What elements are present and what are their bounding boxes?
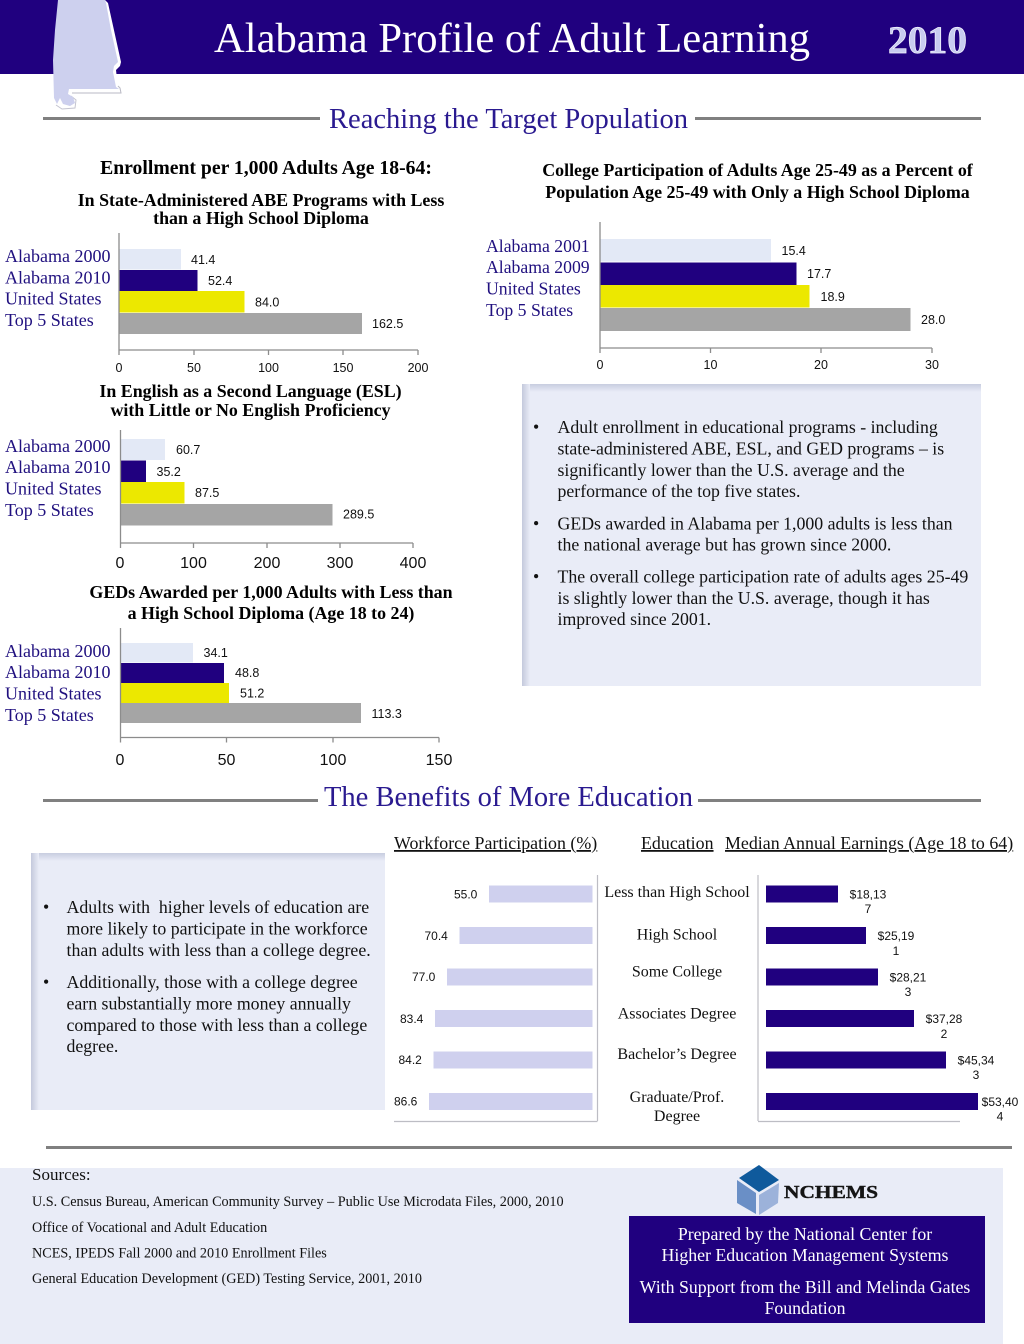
panel: key findings on reaching target population: GEDs awarded in Alabama per 1,000 adults is less than: [558, 514, 953, 534]
bar chart: median annual earnings: $18,13: [850, 888, 887, 902]
bar chart: workforce participation: 70.4: [424, 929, 448, 943]
bar chart: median annual earnings: $28,21: [890, 970, 927, 984]
bar chart: ABE enrollment: 150: [333, 361, 353, 375]
panel: benefits text: compared to those with less than a college: [66, 1015, 367, 1035]
heading: college participation: College Participation of Adults Age 25-49 as a Percent of: [542, 160, 974, 180]
bar chart: ESL enrollment: 35.2: [156, 465, 181, 479]
heading: GEDs awarded: a High School Diploma (Age 18 to 24): [128, 603, 414, 624]
sources: U.S. Census Bureau, American Community Survey – Public Use Microdata Files, 2000, 2010: [32, 1194, 564, 1210]
heading: ESL: [99, 381, 402, 420]
bar chart: ESL enrollment: Top 5 States: [5, 500, 94, 520]
heading: ABE programs: than a High School Diploma: [153, 208, 369, 228]
bar chart: GEDs awarded: 34.1: [204, 646, 228, 660]
bar chart: GEDs awarded: 113.3: [372, 707, 402, 721]
bar chart: GEDs awarded: 50: [218, 752, 236, 769]
bar chart: ESL enrollment: Alabama 2000: [5, 436, 110, 456]
bar chart: median annual earnings: $25,19: [878, 929, 915, 943]
heading: ABE programs: [78, 190, 444, 228]
bar chart: median annual earnings: [758, 875, 1019, 1124]
panel: key findings on reaching target population: •: [533, 514, 539, 534]
panel: benefits text: [31, 853, 385, 1110]
heading: Reaching the Target Population: [43, 104, 981, 135]
callout: prepared by: Foundation: [764, 1298, 846, 1318]
panel: key findings on reaching target population: state-administered ABE, ESL, and GED programs – is: [558, 438, 944, 458]
year: 2010: [888, 18, 967, 62]
bar chart: ABE enrollment: Alabama 2010: [5, 268, 110, 288]
bar chart: ABE enrollment: Alabama 2000: [5, 246, 110, 266]
bar chart: GEDs awarded: Alabama 2000: [5, 641, 110, 661]
bar chart: GEDs awarded: United States: [5, 684, 102, 704]
bar chart: ESL enrollment: 100: [180, 555, 207, 572]
bar chart: GEDs awarded: Alabama 2010: [5, 662, 110, 682]
bar chart: ABE enrollment: 52.4: [208, 274, 232, 288]
bar chart: median annual earnings: 7: [865, 902, 872, 916]
panel: benefits text: earn substantially more money annually: [66, 994, 351, 1014]
callout: prepared by: Prepared by the National Center for: [678, 1224, 932, 1244]
bar chart: college participation: 0: [597, 358, 604, 372]
column header: workforce participation: Workforce Participation (%): [394, 833, 597, 854]
bar chart: college participation: Top 5 States: [486, 300, 573, 320]
bar chart: ABE enrollment: 0: [116, 361, 123, 375]
education level labels: Bachelor’s Degree: [617, 1046, 737, 1063]
bar chart: ESL enrollment: Alabama 2010: [5, 457, 110, 477]
bar chart: ESL enrollment: 289.5: [343, 508, 374, 522]
bar chart: college participation: 17.7: [807, 267, 831, 281]
heading: enrollment: Enrollment per 1,000 Adults Age 18-64:: [100, 157, 432, 179]
bar chart: median annual earnings: 3: [973, 1068, 980, 1082]
bar chart: ESL enrollment: 300: [327, 555, 353, 572]
bar chart: ABE enrollment: United States: [5, 288, 102, 308]
heading: The Benefits of More Education: [43, 782, 981, 813]
heading: ESL: with Little or No English Proficiency: [110, 400, 391, 420]
callout: prepared by: Higher Education Management Systems: [662, 1245, 949, 1265]
education level labels: Degree: [654, 1108, 700, 1125]
panel: benefits text: Adults with higher levels of education are: [66, 897, 369, 917]
bar chart: college participation: 10: [704, 358, 717, 372]
bar chart: ESL enrollment: 87.5: [195, 486, 219, 500]
bar chart: ESL enrollment: [5, 430, 426, 572]
panel: key findings on reaching target population: improved since 2001.: [558, 609, 711, 629]
education level labels: Less than High School: [604, 884, 750, 901]
callout: prepared by: With Support from the Bill and Melinda Gates: [640, 1277, 970, 1297]
heading: The Benefits of More Education: The Benefits of More Education: [324, 782, 693, 813]
panel: key findings on reaching target population: the national average but has grown since 2000.: [558, 534, 891, 554]
bar chart: median annual earnings: $45,34: [958, 1054, 995, 1068]
bar chart: ABE enrollment: Top 5 States: [5, 310, 94, 330]
panel: key findings on reaching target population: •: [533, 566, 539, 586]
title: Alabama Profile of Adult Learning: [214, 15, 810, 62]
bar chart: college participation: Alabama 2001: [486, 236, 590, 256]
sources: General Education Development (GED) Testing Service, 2001, 2010: [32, 1271, 422, 1287]
panel: benefits text: •: [43, 972, 49, 992]
panel: benefits text: more likely to participate in the workforce: [66, 918, 368, 938]
bar chart: median annual earnings: $37,28: [926, 1012, 963, 1026]
bar chart: college participation: 20: [814, 358, 828, 372]
panel: benefits text: degree.: [66, 1036, 118, 1056]
bar chart: college participation: 18.9: [820, 290, 845, 304]
panel: key findings on reaching target population: performance of the top five states.: [558, 481, 800, 501]
panel: key findings on reaching target population: is slightly lower than the U.S. average, though it has: [558, 588, 930, 608]
bar chart: ABE enrollment: [5, 233, 428, 375]
callout: prepared by: [629, 1216, 985, 1323]
bar chart: workforce participation: 84.2: [398, 1053, 422, 1067]
panel: benefits text: Additionally, those with a college degree: [66, 972, 358, 992]
sources: Office of Vocational and Adult Education: [32, 1220, 267, 1236]
panel: key findings on reaching target population: [522, 384, 981, 686]
heading: ABE programs: In State-Administered ABE Programs with Less: [78, 190, 444, 210]
bar chart: ABE enrollment: 50: [187, 361, 201, 375]
column header: earnings: Median Annual Earnings (Age 18 to 64): [725, 833, 1013, 854]
heading: ESL: In English as a Second Language (ESL): [99, 381, 402, 402]
bar chart: GEDs awarded: 150: [426, 752, 452, 769]
sources: Sources:: [32, 1165, 91, 1184]
bar chart: ABE enrollment: 100: [258, 361, 279, 375]
panel: key findings on reaching target population: The overall college participation rate of adults ages 25-49: [558, 566, 968, 586]
heading: college participation: [542, 160, 974, 202]
bar chart: GEDs awarded: [5, 628, 452, 769]
education level labels: Associates Degree: [618, 1006, 736, 1022]
icon: NCHEMS logo: NCHEMS: [784, 1182, 878, 1202]
bar chart: ESL enrollment: 200: [254, 555, 280, 572]
sources: NCES, IPEDS Fall 2000 and 2010 Enrollment Files: [32, 1246, 327, 1262]
bar chart: workforce participation: 86.6: [394, 1094, 418, 1108]
column header: education: Education: [641, 833, 714, 853]
bar chart: ABE enrollment: 41.4: [191, 253, 215, 267]
bar chart: college participation: United States: [486, 278, 581, 298]
bar chart: median annual earnings: 1: [893, 944, 900, 958]
bar chart: ESL enrollment: 60.7: [176, 443, 200, 457]
education level labels: High School: [637, 926, 718, 944]
panel: key findings on reaching target population: Adult enrollment in educational programs - including: [558, 417, 938, 437]
header banner: [0, 0, 1024, 109]
icon: Alabama state map: [53, 0, 121, 109]
bar chart: ESL enrollment: 0: [116, 555, 125, 572]
panel: key findings on reaching target population: •: [533, 417, 539, 437]
bar chart: GEDs awarded: 51.2: [240, 686, 264, 700]
bar chart: college participation: 15.4: [782, 244, 806, 258]
panel: key findings on reaching target population: significantly lower than the U.S. average and the: [558, 460, 905, 480]
bar chart: college participation: 30: [925, 358, 939, 372]
sources: [32, 1165, 564, 1287]
bar chart: workforce participation: 83.4: [400, 1012, 424, 1026]
panel: benefits text: than adults with less than a college degree.: [66, 940, 371, 960]
bar chart: median annual earnings: 3: [905, 985, 912, 999]
education level labels: Graduate/Prof.: [630, 1089, 724, 1106]
bar chart: ABE enrollment: 162.5: [372, 317, 403, 331]
bar chart: ABE enrollment: 84.0: [255, 296, 279, 310]
bar chart: GEDs awarded: 100: [320, 752, 346, 769]
icon: NCHEMS logo: [737, 1165, 878, 1215]
heading: Reaching the Target Population: Reaching the Target Population: [329, 104, 688, 135]
bar chart: GEDs awarded: Top 5 States: [5, 705, 94, 725]
bar chart: GEDs awarded: 48.8: [235, 666, 259, 680]
bar chart: median annual earnings: 4: [997, 1110, 1004, 1124]
bar chart: workforce participation: [394, 875, 598, 1122]
bar chart: workforce participation: 55.0: [454, 888, 478, 902]
panel: footer background: [0, 1168, 1003, 1344]
heading: college participation: Population Age 25-49 with Only a High School Diploma: [545, 182, 970, 202]
bar chart: college participation: [486, 222, 945, 372]
bar chart: college participation: Alabama 2009: [486, 257, 590, 277]
heading: GEDs awarded: GEDs Awarded per 1,000 Adults with Less than: [89, 582, 453, 602]
bar chart: workforce participation: 77.0: [412, 970, 436, 984]
bar chart: GEDs awarded: 0: [116, 752, 125, 769]
bar chart: ABE enrollment: 200: [408, 361, 428, 375]
education level labels: [604, 884, 750, 1125]
bar chart: college participation: 28.0: [921, 313, 945, 327]
panel: benefits text: •: [43, 897, 49, 917]
bar chart: ESL enrollment: United States: [5, 478, 102, 498]
bar chart: median annual earnings: $53,40: [982, 1095, 1019, 1109]
bar chart: median annual earnings: 2: [941, 1027, 948, 1041]
education level labels: Some College: [632, 964, 722, 980]
bar chart: ESL enrollment: 400: [400, 555, 426, 572]
heading: GEDs awarded: [89, 582, 453, 624]
